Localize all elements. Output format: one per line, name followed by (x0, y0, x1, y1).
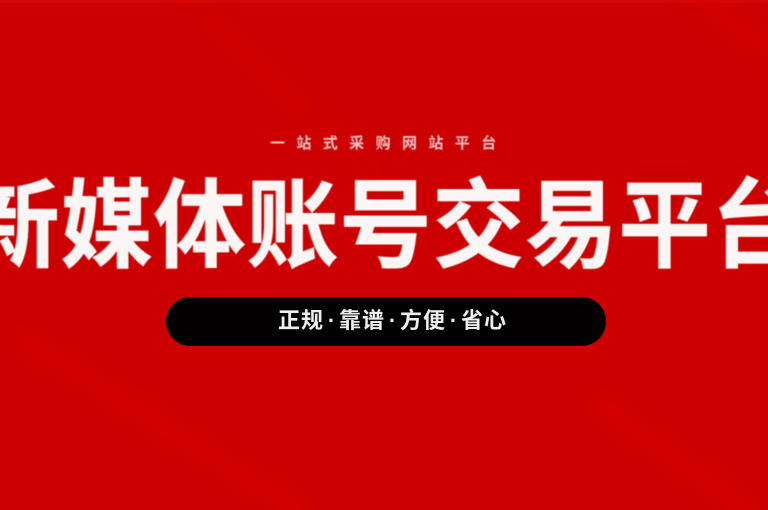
tagline pill (166, 297, 606, 346)
tagline text: · (328, 308, 335, 333)
tagline text: · (389, 308, 396, 333)
tagline text: 正规 靠谱 方便 省心 (278, 308, 507, 333)
subtitle: 一站式采购网站平台 (270, 135, 508, 152)
tagline text: · (450, 308, 457, 333)
